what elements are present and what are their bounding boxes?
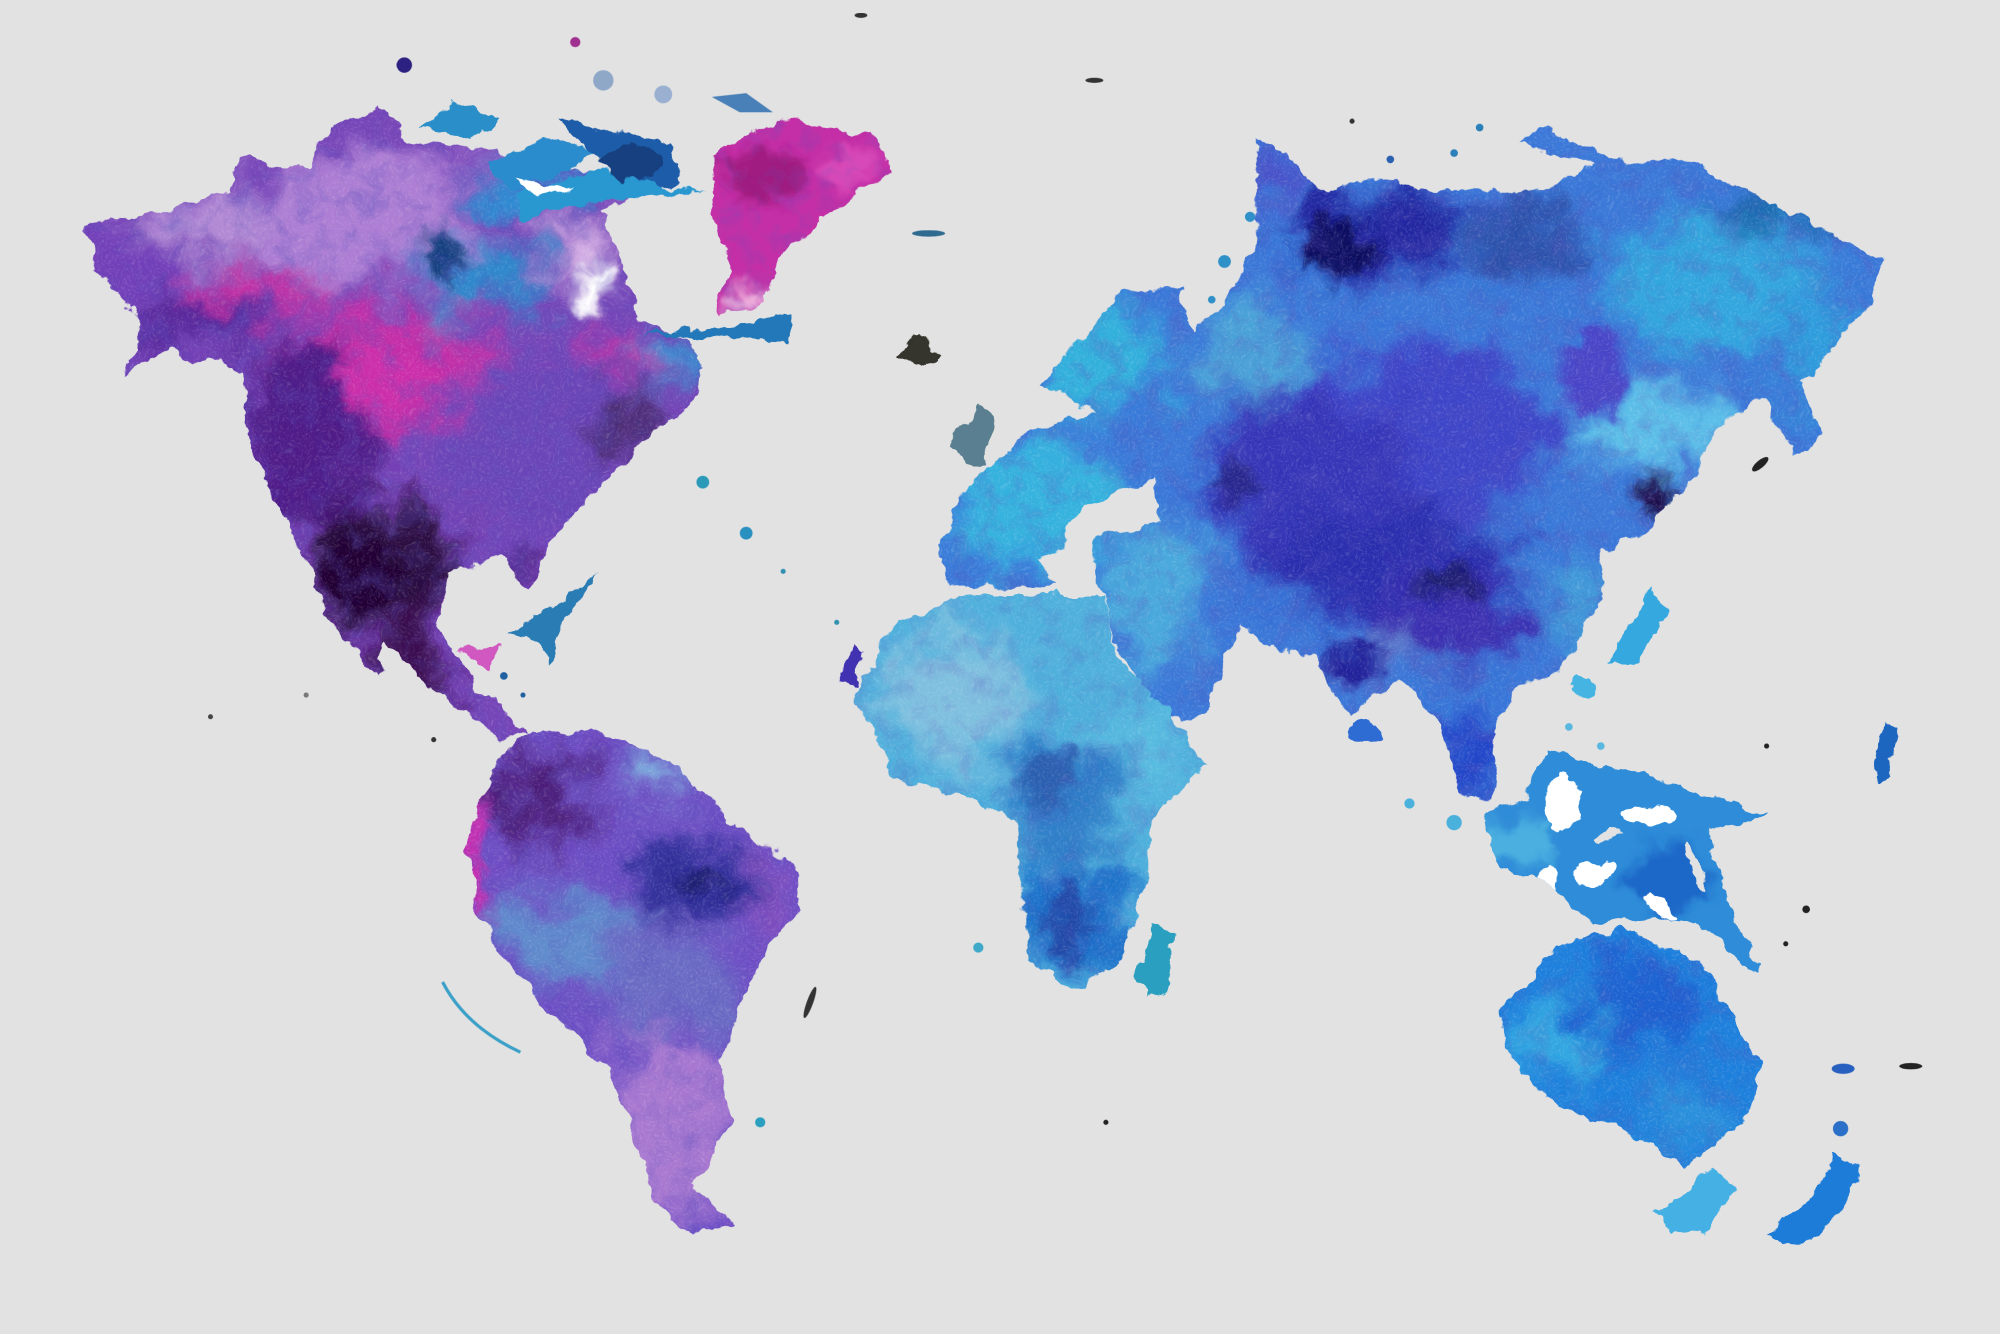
- continent: Australia: [1498, 924, 1763, 1169]
- arctic islands: [491, 117, 704, 219]
- paint splatter dots: [208, 13, 1922, 1136]
- islands: Japan, Madagascar, New Zealand and others: [421, 102, 1895, 1247]
- islands: Indonesia and Philippines: [1483, 750, 1768, 974]
- continent: Eurasia: [918, 115, 1901, 816]
- map landmasses: [82, 99, 1898, 1245]
- continent: South America: [463, 728, 801, 1236]
- continent: North America: [82, 106, 702, 743]
- gaps in islands: [1541, 775, 1710, 925]
- continent: Greenland: [710, 116, 892, 317]
- continent: Africa: [854, 588, 1208, 990]
